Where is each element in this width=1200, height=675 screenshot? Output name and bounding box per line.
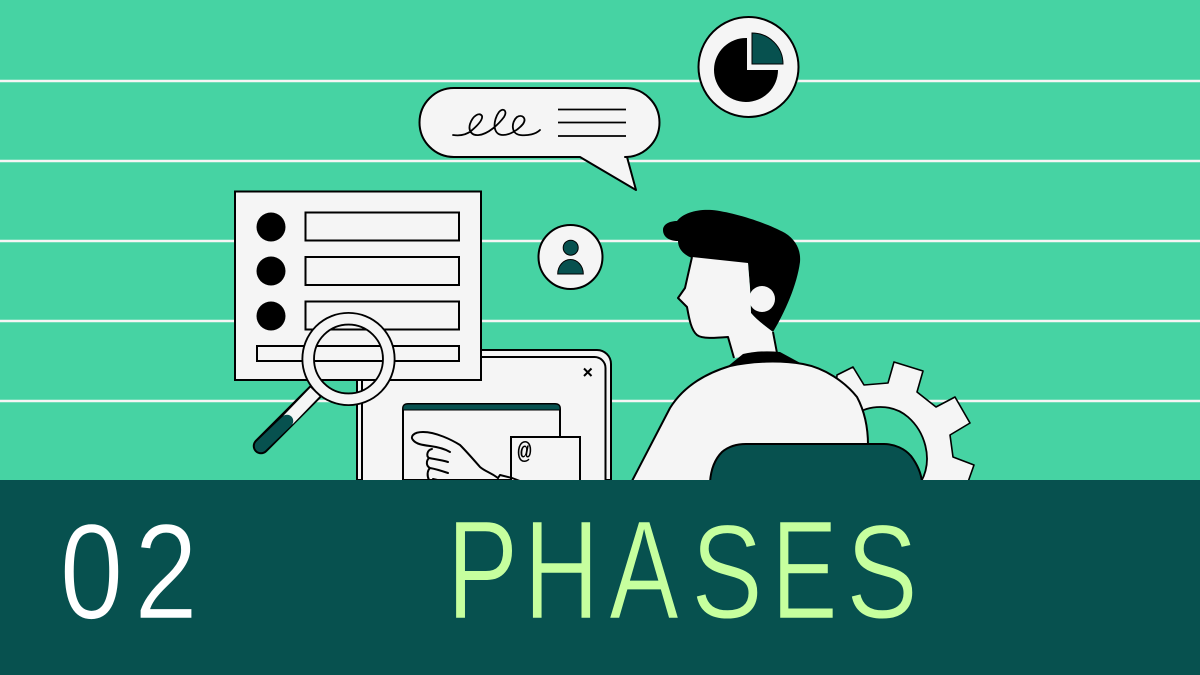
bullet dots (256, 212, 286, 330)
icon: user badge (538, 225, 602, 289)
icon: magnifying glass (261, 319, 389, 446)
heading (447, 491, 918, 649)
list rows (257, 212, 459, 361)
section number: 0 (60, 495, 123, 648)
pointing hand (412, 432, 520, 481)
email card: @ (517, 440, 532, 466)
person from behind (632, 210, 922, 482)
heading: S (691, 497, 763, 647)
collar (727, 351, 804, 367)
browser window (357, 350, 611, 487)
section number: 2 (134, 495, 198, 648)
title band (0, 480, 1200, 675)
hair (663, 210, 800, 332)
icon: gear (830, 362, 974, 482)
heading: P (447, 491, 518, 649)
heading: S (846, 497, 918, 647)
email card (511, 437, 580, 487)
ear (749, 286, 775, 312)
heading: A (609, 492, 679, 649)
icon: pie chart badge (698, 17, 798, 117)
icon: close cross (584, 368, 592, 376)
chair back (710, 444, 922, 482)
speech bubble (420, 88, 659, 190)
checklist panel (235, 192, 481, 380)
inner page with title bar (403, 404, 560, 480)
heading: E (772, 491, 837, 649)
heading: H (524, 492, 599, 649)
face and neck (678, 257, 777, 358)
shoulders (632, 362, 868, 481)
section number (60, 495, 198, 648)
